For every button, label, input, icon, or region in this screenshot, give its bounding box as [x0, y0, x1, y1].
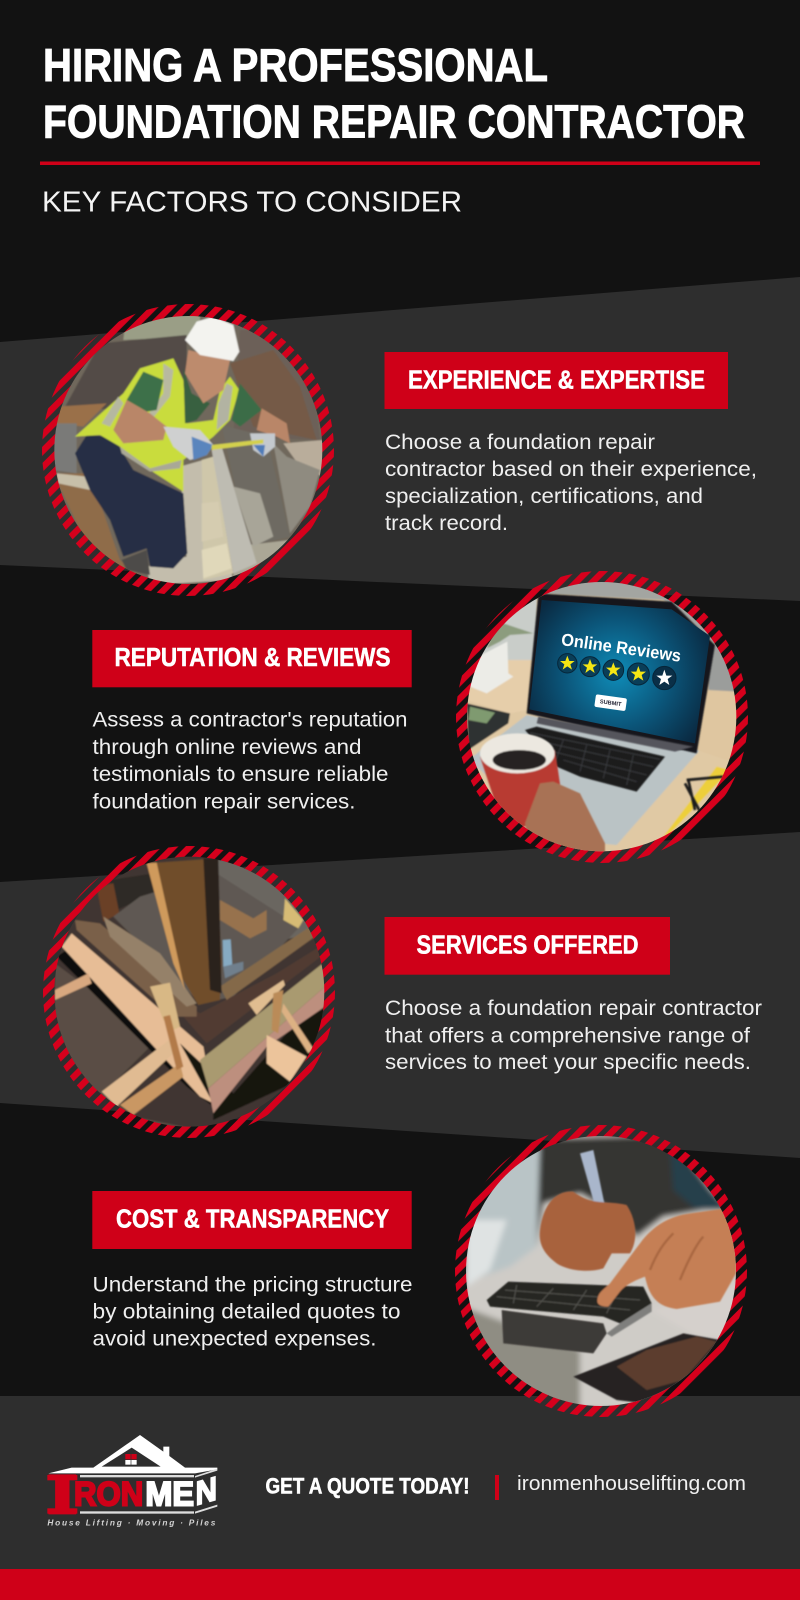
body text	[385, 430, 757, 535]
photo: wooden foundation formwork	[43, 846, 335, 1138]
logo: Iron Men: I	[47, 1461, 78, 1526]
website: ironmenhouselifting.com	[517, 1473, 746, 1495]
body text: Choose a foundation repair	[385, 430, 655, 454]
body text: Understand the pricing structure	[92, 1273, 412, 1297]
screen text: Online Reviews	[560, 629, 682, 666]
body text: Choose a foundation repair contractor	[385, 996, 762, 1020]
body text: by obtaining detailed quotes to	[92, 1300, 401, 1324]
logo: Iron Men: N	[196, 1470, 217, 1513]
footer background	[0, 1396, 800, 1600]
body text	[92, 1273, 412, 1351]
panel: cost and transparency	[92, 1125, 747, 1417]
submit button	[594, 694, 627, 711]
body text	[92, 708, 408, 813]
icon: five star rating	[558, 654, 676, 690]
panel: reputation and reviews	[92, 571, 748, 863]
title	[43, 39, 745, 148]
body text: testimonials to ensure reliable	[92, 762, 388, 786]
panel: services offered	[43, 846, 762, 1138]
heading tag: REPUTATION & REVIEWS	[114, 642, 390, 672]
body text: avoid unexpected expenses.	[92, 1327, 376, 1351]
heading tag: SERVICES OFFERED	[416, 929, 638, 959]
footer content	[47, 1435, 746, 1528]
subtitle: KEY FACTORS TO CONSIDER	[42, 186, 462, 218]
photo: laptop showing online reviews	[456, 571, 748, 863]
title: HIRING A PROFESSIONAL	[43, 39, 548, 91]
header	[40, 39, 760, 218]
logo: Iron Men: House Lifting · Moving · Piles	[47, 1518, 216, 1528]
background band 2	[0, 832, 800, 1158]
logo: Iron Men: ME	[145, 1476, 194, 1514]
body text: services to meet your specific needs.	[385, 1050, 751, 1074]
heading tag	[92, 630, 412, 687]
photo: hands using a calculator	[455, 1125, 747, 1417]
panel: experience and expertise	[42, 304, 757, 596]
logo: Iron Men: RON	[74, 1476, 143, 1514]
body text: contractor based on their experience,	[385, 457, 757, 481]
body text	[385, 996, 762, 1074]
submit button: SUBMIT	[599, 699, 622, 708]
body text: Assess a contractor's reputation	[92, 708, 408, 732]
heading tag	[384, 917, 670, 975]
heading tag: COST & TRANSPARENCY	[116, 1204, 389, 1234]
body text: foundation repair services.	[92, 789, 356, 813]
call to action: GET A QUOTE TODAY!	[266, 1473, 470, 1498]
body text: through online reviews and	[92, 735, 362, 759]
photo: worker measuring foundation	[42, 304, 334, 596]
background band 1	[0, 277, 800, 601]
heading tag: EXPERIENCE & EXPERTISE	[408, 364, 705, 394]
body text: that offers a comprehensive range of	[385, 1023, 750, 1047]
body text: track record.	[385, 511, 508, 535]
heading tag	[384, 352, 728, 409]
logo: Iron Men	[47, 1435, 217, 1528]
body text: specialization, certifications, and	[385, 484, 703, 508]
heading tag	[92, 1191, 412, 1249]
